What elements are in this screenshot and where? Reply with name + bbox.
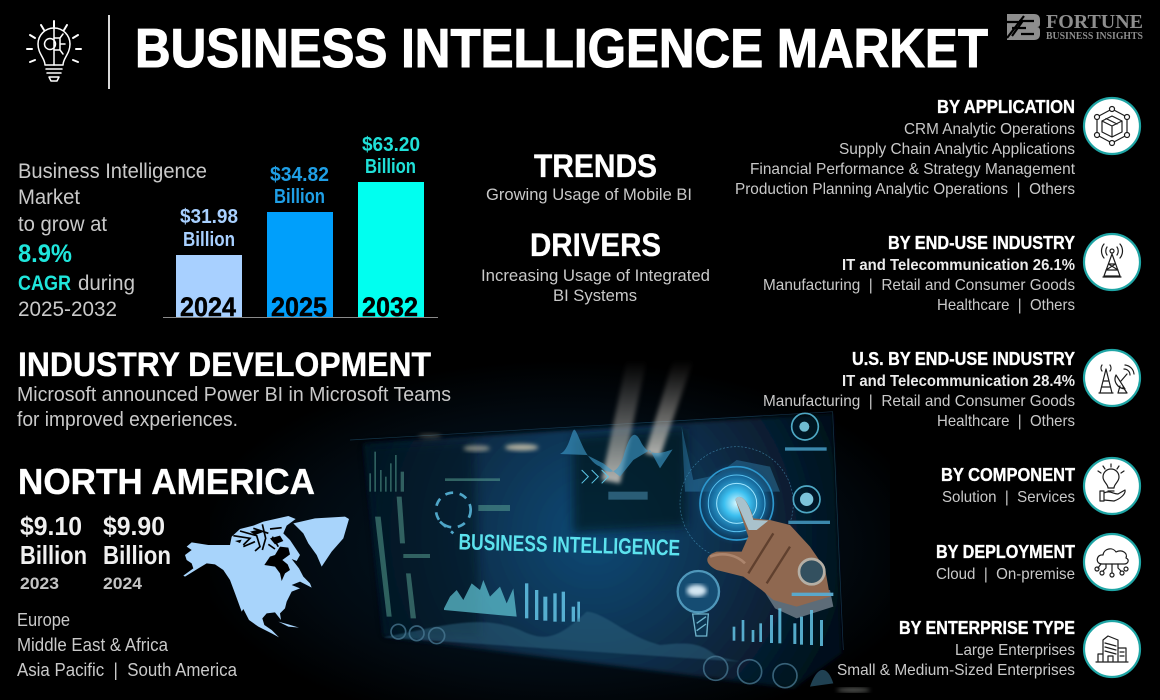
hand	[707, 497, 833, 618]
map: North America	[183, 516, 349, 637]
screen label: BUSINESS INTELLIGENCE	[458, 528, 680, 561]
hero image: business intelligence dashboard	[210, 360, 890, 700]
segment: U.S. by end-use industry: IT and Telecommunication 28.4%	[842, 373, 1075, 390]
text: CAGR growth statement: 8.9%	[18, 240, 72, 268]
text: CAGR growth statement: 2025-2032	[18, 298, 117, 321]
text: trends body: Growing Usage of Mobile BI	[486, 185, 692, 204]
segment: by deployment	[936, 542, 1075, 583]
stat: 2024 value: $9.90	[103, 511, 165, 541]
bar 2032: 2032	[362, 292, 418, 322]
segment: by deployment: Cloud | On-premise	[936, 566, 1075, 583]
text: other regions: Asia Pacific | South America	[17, 660, 238, 680]
glowing lights	[418, 434, 538, 451]
text: CAGR growth statement	[18, 160, 207, 321]
bar chart: market size	[163, 134, 438, 322]
stat: 2023 value: $9.10	[20, 511, 82, 541]
target radar	[680, 427, 793, 560]
heading: industry development: INDUSTRY DEVELOPMENT	[18, 346, 431, 384]
segment: by application	[735, 97, 1076, 198]
stat: 2024 value: Billion	[103, 540, 171, 570]
text: other regions: Middle East & Africa	[17, 635, 169, 655]
smoke streaks	[602, 360, 693, 483]
segment: U.S. by end-use industry: Healthcare | Others	[937, 413, 1075, 430]
text: other regions: Europe	[17, 610, 70, 630]
text: industry development body: Microsoft announced Power BI in Microsoft Teams	[17, 384, 451, 406]
bar 2024: Billion	[183, 229, 235, 251]
bottom circle icons	[391, 624, 797, 688]
segment: U.S. by end-use industry: U.S. BY END-USE INDUSTRY	[852, 349, 1075, 369]
text: drivers body: BI Systems	[553, 286, 637, 305]
icon: application box network	[1084, 98, 1140, 154]
text: other regions	[17, 610, 238, 680]
segment: by end-use industry: BY END-USE INDUSTRY	[888, 233, 1075, 253]
header divider	[108, 15, 110, 89]
text: industry development body: for improved experiences.	[17, 409, 238, 431]
text: CAGR growth statement: to grow at	[18, 213, 107, 236]
segment: by component: Solution | Services	[942, 489, 1075, 506]
bar 2032: $63.20	[362, 134, 420, 156]
bar 2025	[267, 164, 333, 322]
stat: 2024 value: 2024	[103, 574, 143, 593]
text: CAGR growth statement: Market	[18, 186, 80, 209]
segment: by application: Supply Chain Analytic Applications	[839, 141, 1075, 158]
bar 2024: $31.98	[180, 206, 238, 228]
segment: by component: BY COMPONENT	[941, 465, 1075, 485]
stat: 2024 value	[103, 511, 171, 593]
icon: telecom tower	[1084, 234, 1140, 290]
left circular chart	[436, 493, 471, 533]
text: industry development body	[17, 384, 451, 431]
segment: by end-use industry: IT and Telecommunication 26.1%	[842, 257, 1075, 274]
text: CAGR growth statement: CAGR	[18, 272, 71, 295]
segment: by end-use industry	[763, 233, 1075, 314]
magnifier	[678, 571, 719, 636]
bar 2032	[358, 134, 424, 322]
text: drivers body	[481, 266, 710, 305]
left bars	[369, 452, 510, 618]
heading: trends: TRENDS	[534, 148, 657, 184]
text: drivers body: Increasing Usage of Integrated	[481, 266, 710, 285]
bar 2025: 2025	[271, 292, 327, 322]
icon: tower and satellite dish	[1084, 350, 1140, 406]
heading: north america: NORTH AMERICA	[18, 461, 315, 502]
wave chart	[560, 430, 673, 500]
stat: 2023 value	[20, 511, 87, 593]
heading: drivers: DRIVERS	[530, 227, 661, 263]
logo: Fortune Business Insights: BUSINESS INSIGHTS	[1046, 31, 1143, 42]
icon: office buildings	[1084, 621, 1140, 677]
bar 2024	[176, 206, 242, 322]
text: CAGR growth statement: Business Intelligence	[18, 160, 207, 183]
segment: by enterprise type: BY ENTERPRISE TYPE	[899, 618, 1075, 638]
segment: by application: Financial Performance & Strategy Management	[750, 161, 1076, 178]
segment: by enterprise type: Large Enterprises	[955, 642, 1075, 659]
bar 2024: 2024	[180, 292, 236, 322]
stat: 2023 value: 2023	[20, 574, 59, 593]
segment: U.S. by end-use industry	[763, 349, 1075, 430]
lower area chart	[444, 580, 517, 617]
icon: lightbulb with brain and gear	[27, 21, 81, 81]
segment: U.S. by end-use industry: Manufacturing | Retail and Consumer Goods	[763, 393, 1075, 410]
segment: by application: BY APPLICATION	[937, 97, 1075, 117]
mountains	[383, 612, 740, 662]
segment: by application: CRM Analytic Operations	[904, 121, 1075, 138]
logo: Fortune Business Insights	[1007, 11, 1143, 42]
icon: cloud network	[1084, 534, 1140, 590]
bar 2025: Billion	[274, 186, 325, 208]
segment: by application: Production Planning Analytic Operations | Others	[735, 181, 1075, 198]
bar 2025: $34.82	[270, 164, 329, 186]
title: BUSINESS INTELLIGENCE MARKET	[135, 17, 988, 79]
stat: 2023 value: Billion	[20, 540, 87, 570]
segment: by end-use industry: Healthcare | Others	[937, 297, 1075, 314]
segment: by end-use industry: Manufacturing | Retail and Consumer Goods	[763, 277, 1075, 294]
bar 2032: Billion	[365, 156, 416, 178]
screen icons, top right	[785, 413, 830, 524]
segment: by enterprise type: Small & Medium-Sized Enterprises	[837, 662, 1075, 679]
text: CAGR growth statement: during	[78, 272, 135, 295]
lower bars	[525, 583, 823, 646]
segment: by enterprise type	[837, 618, 1075, 679]
segment: by deployment: BY DEPLOYMENT	[936, 542, 1075, 562]
logo: Fortune Business Insights: FORTUNE	[1046, 11, 1143, 33]
icon: hand holding lightbulb	[1084, 458, 1140, 514]
segment: by component	[941, 465, 1075, 506]
